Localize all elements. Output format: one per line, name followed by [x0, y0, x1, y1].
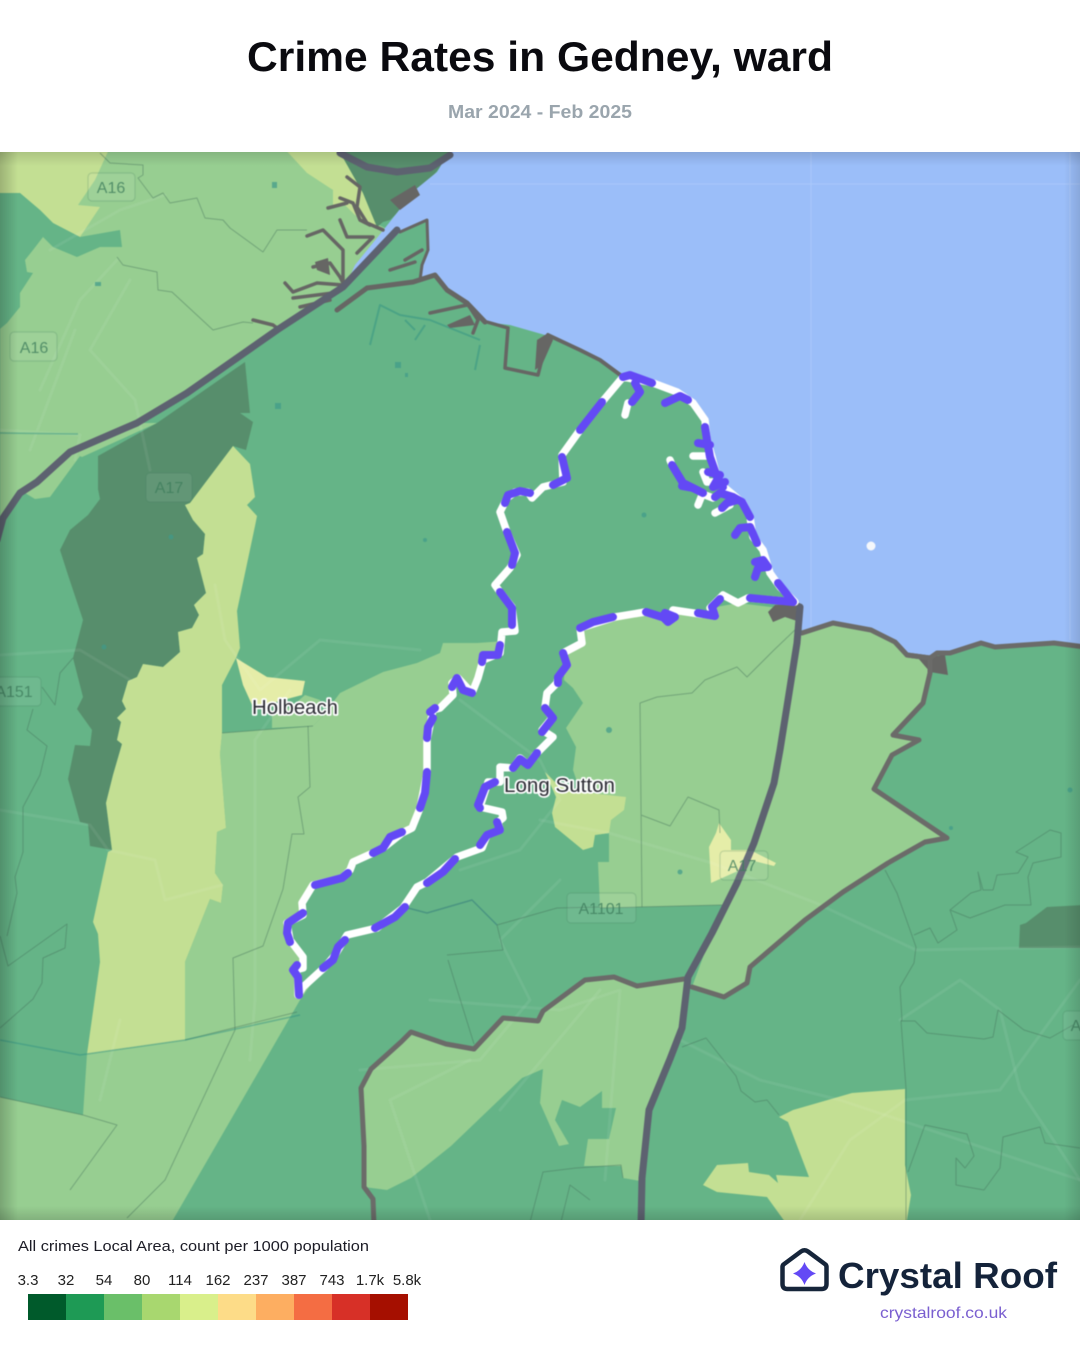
road label: A151 [0, 678, 40, 704]
white dot in the sea [866, 542, 876, 550]
region: Holbeach pale yellow [236, 658, 305, 707]
road label: A16 [10, 332, 57, 361]
legend scale labels: 114 [168, 1272, 192, 1289]
thin ward boundaries [0, 153, 1080, 1226]
map edge shading [0, 152, 1080, 1220]
region: western yellow-green strip [87, 446, 257, 1054]
ward outline: Gedney [287, 375, 795, 995]
region: A17 dark green [60, 362, 253, 850]
region: north yellow-green [287, 152, 376, 225]
road label: A17 east [720, 851, 768, 880]
legend scale labels: 743 [319, 1272, 345, 1289]
road label: A17: A17 [155, 480, 183, 497]
region: south of Holbeach light patch [272, 695, 322, 728]
region: A17 light strip [70, 423, 157, 457]
road: coastal A17 [0, 230, 397, 540]
place label: Holbeach: Holbeach [252, 697, 338, 719]
legend scale labels: 32 [58, 1272, 74, 1289]
marsh patches [315, 185, 948, 675]
region: Long Sutton yellow-green [545, 772, 626, 850]
region: north-west yellow-green corner [0, 147, 110, 237]
grey boundary: coast east [907, 643, 1080, 658]
road label: A1101: A1101 [578, 901, 624, 918]
sea tile seams [430, 152, 1080, 640]
ward fill [291, 608, 708, 982]
road label: A16 north: A16 [97, 180, 125, 197]
subtitle: date range: Mar 2024 - Feb 2025 [448, 102, 632, 122]
motorway-style road: A17 north-south [641, 607, 800, 1226]
region: south-east dark green [1019, 905, 1080, 948]
legend scale labels: 387 [281, 1272, 307, 1289]
legend scale labels: 162 [205, 1272, 231, 1289]
creeks and marsh lines [253, 177, 623, 377]
ward outline purple dashes [287, 375, 793, 995]
region: western mid green [0, 193, 122, 333]
legend scale labels: 5.8k [393, 1272, 422, 1289]
legend colour bar [28, 1294, 408, 1320]
region: east of ward light green [564, 603, 797, 908]
road label: A1101 [567, 893, 636, 923]
region: western light green band [0, 640, 520, 1225]
legend scale labels: 237 [243, 1272, 269, 1289]
choropleth map [0, 147, 1080, 1226]
legend scale labels [18, 1272, 422, 1289]
icon: house with star [782, 1250, 826, 1289]
region: north-west light green [0, 147, 385, 525]
grey boundary: south [361, 977, 684, 1226]
road label: A16 north [88, 173, 135, 201]
road label: A17 [147, 474, 191, 501]
legend scale labels: 3.3 [18, 1272, 38, 1289]
region: southern light green [361, 977, 684, 1190]
place label: Long Sutton: Long Sutton [504, 775, 615, 797]
sea [345, 147, 1080, 658]
legend [18, 1238, 422, 1320]
minor roads [0, 195, 1080, 1220]
brand logo [782, 1250, 1058, 1322]
ward outline white base [287, 377, 795, 995]
legend title: All crimes Local Area, count per 1000 population [18, 1238, 369, 1255]
grey boundary: east light green [692, 623, 947, 997]
legend scale labels: 80 [134, 1272, 150, 1289]
road: north curve [340, 153, 450, 172]
title: Crime Rates in Gedney, ward [247, 33, 833, 80]
drains and ponds [95, 182, 1072, 874]
rivers and drains [0, 305, 497, 1055]
road label: A17 east: A17 [728, 858, 756, 875]
road label: right edge [1063, 1011, 1080, 1040]
brand name: Crystal Roof [838, 1255, 1058, 1296]
legend scale labels: 1.7k [356, 1272, 385, 1289]
road label: A16: A16 [20, 340, 48, 357]
region: north dark green [344, 152, 448, 226]
region: eastern light green [692, 623, 947, 997]
region: south-east yellow-green [703, 1089, 911, 1226]
brand url: crystalroof.co.uk [880, 1305, 1008, 1322]
legend scale labels: 54 [96, 1272, 112, 1289]
region: Sutton Bridge pale yellow [709, 823, 776, 883]
